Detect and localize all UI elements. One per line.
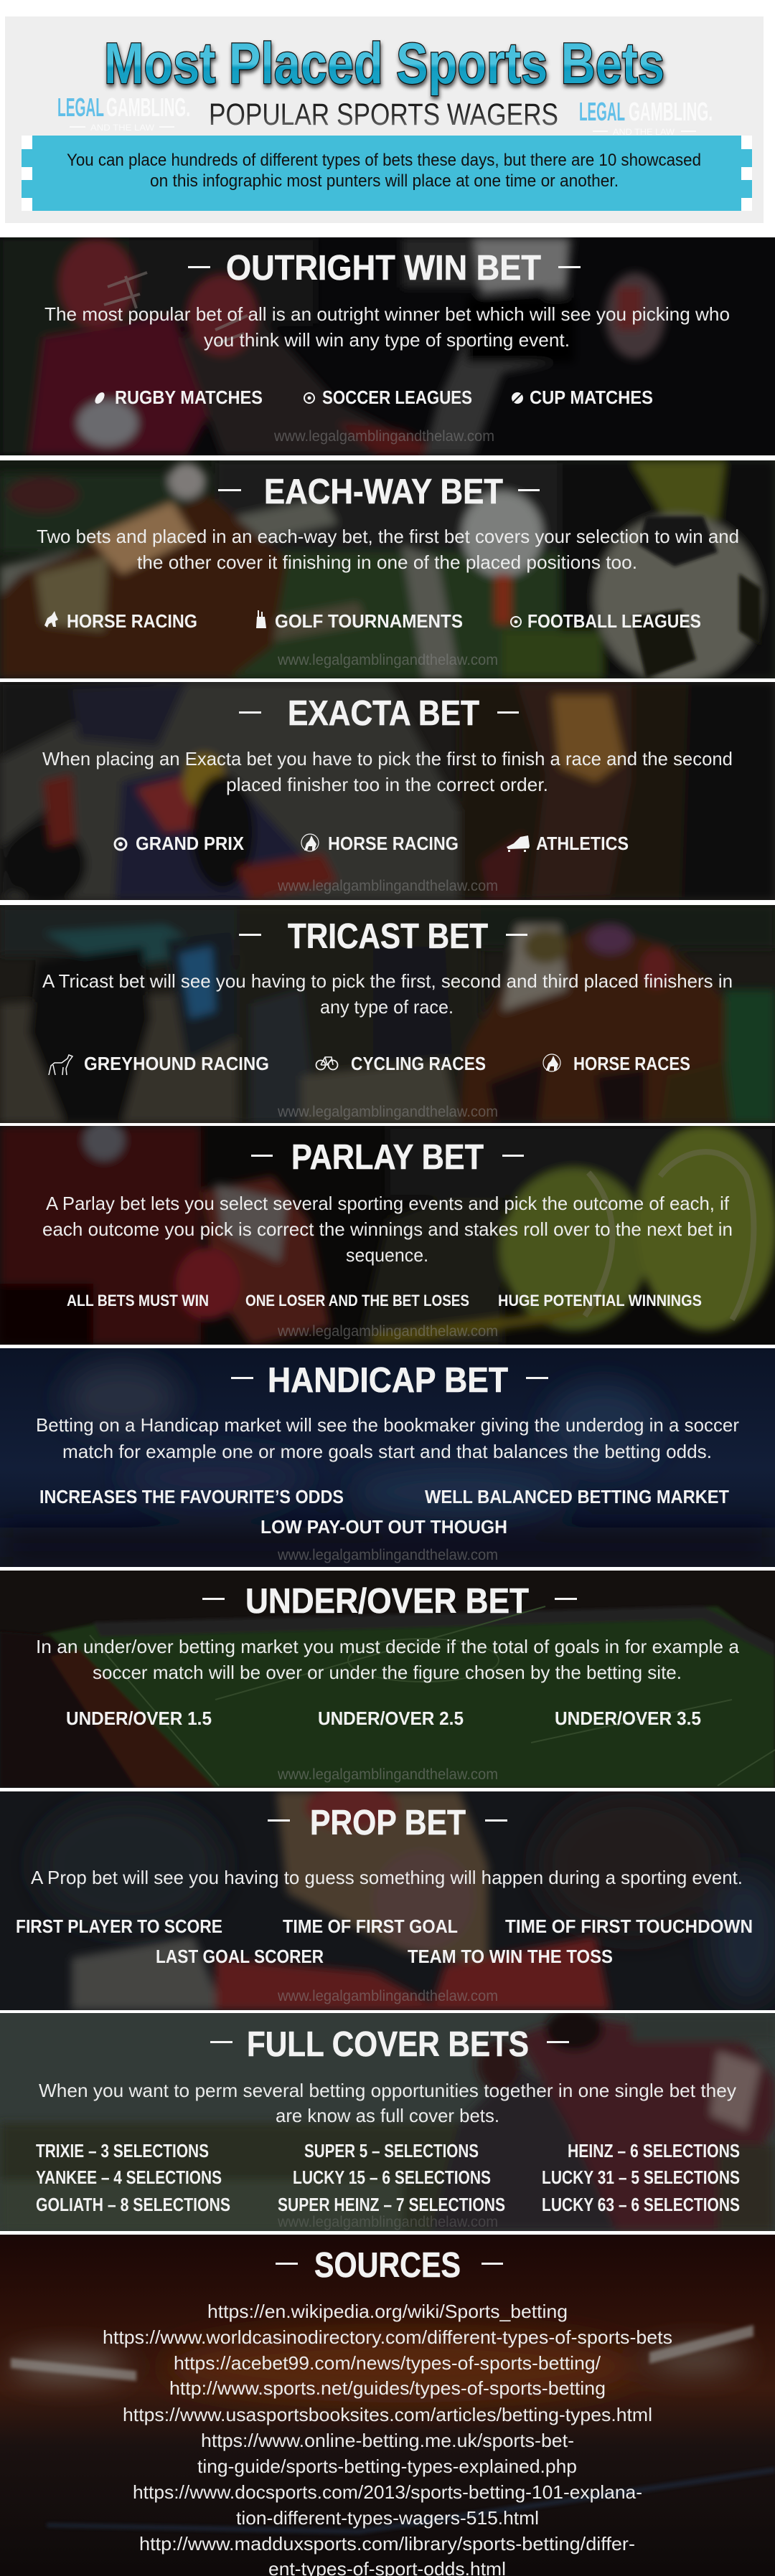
source list: https://www.worldcasinodirectory.com/different-types-of-sports-bets — [103, 2326, 672, 2348]
watermark: www.legalgamblingandthelaw.com — [277, 1323, 498, 1340]
description: A Parlay bet lets you select several sporting events and pick the outcome of each, if — [46, 1193, 730, 1214]
description: The most popular bet of all is an outright winner bet which will see you picking who — [44, 303, 730, 325]
logo: right legal gambling: LEGAL — [579, 97, 625, 126]
watermark: www.legalgamblingandthelaw.com — [277, 1766, 498, 1783]
description — [39, 2080, 736, 2126]
item: football leagues: FOOTBALL LEAGUES — [527, 610, 701, 632]
heading: HANDICAP BET — [268, 1361, 508, 1400]
description: match for example one or more goals start and that balances the betting odds. — [62, 1441, 712, 1462]
heading: TRICAST BET — [288, 917, 488, 956]
item: rugby matches: RUGBY MATCHES — [115, 387, 263, 408]
description: any type of race. — [320, 996, 454, 1018]
watermark: www.legalgamblingandthelaw.com — [273, 428, 494, 445]
panel: sources — [0, 2235, 775, 2576]
description — [36, 1414, 739, 1462]
description — [36, 1636, 740, 1683]
item: cup matches: CUP MATCHES — [530, 387, 653, 408]
item: horse racing: HORSE RACING — [67, 610, 197, 632]
description: Two bets and placed in an each-way bet, the first bet covers your selection to win and — [37, 526, 739, 547]
source list: tion-different-types-wagers-515.html — [236, 2507, 539, 2529]
panel: handicap bet — [0, 1348, 775, 1567]
list: selections column 1: GOLIATH – 8 SELECTIONS — [36, 2194, 230, 2215]
description: In an under/over betting market you must decide if the total of goals in for example a — [36, 1636, 740, 1657]
description — [44, 303, 730, 351]
description: A Tricast bet will see you having to pick the first, second and third placed finishers in — [42, 970, 733, 992]
intro ribbon: You can place hundreds of different types of bets these days, but there are 10 showcased — [67, 151, 701, 170]
logo: left legal gambling: GAMBLING. — [106, 93, 190, 122]
panel: exacta bet — [0, 682, 775, 900]
logo: right legal gambling — [579, 97, 713, 137]
item: last goal scorer: LAST GOAL SCORER — [156, 1946, 324, 1967]
item: cycling races: CYCLING RACES — [351, 1053, 486, 1074]
heading: UNDER/OVER BET — [245, 1582, 529, 1621]
panel: outright win bet — [0, 237, 775, 455]
logo: left legal gambling: LEGAL — [57, 93, 104, 122]
description: Betting on a Handicap market will see the bookmaker giving the underdog in a soccer — [36, 1414, 739, 1436]
panel: full cover bets — [0, 2013, 775, 2231]
item: time of first goal: TIME OF FIRST GOAL — [283, 1916, 458, 1937]
item: all bets must win: ALL BETS MUST WIN — [67, 1292, 209, 1310]
description — [42, 970, 733, 1018]
item: increases the favourite's odds: INCREASES THE FAVOURITE’S ODDS — [39, 1486, 344, 1507]
header panel — [5, 16, 764, 223]
heading: SOURCES — [314, 2246, 461, 2285]
description: sequence. — [346, 1244, 428, 1266]
description — [42, 748, 733, 795]
list: selections column 1: TRIXIE – 3 SELECTIONS — [36, 2140, 209, 2161]
list: selections column 3: HEINZ – 6 SELECTIONS — [568, 2140, 740, 2161]
subtitle: POPULAR SPORTS WAGERS — [209, 98, 558, 132]
item: time of first touchdown: TIME OF FIRST TOUCHDOWN — [505, 1916, 753, 1937]
heading: EXACTA BET — [288, 694, 479, 733]
logo: right legal gambling: AND THE LAW — [613, 127, 675, 137]
item: golf tournaments: GOLF TOURNAMENTS — [275, 610, 463, 632]
source list: https://www.usasportsbooksites.com/articles/betting-types.html — [123, 2404, 652, 2425]
panel: prop bet — [0, 1791, 775, 2010]
heading: EACH-WAY BET — [264, 473, 503, 511]
source list: http://www.madduxsports.com/library/sports-betting/differ- — [139, 2533, 635, 2554]
item: soccer leagues: SOCCER LEAGUES — [322, 387, 472, 408]
item: horse races: HORSE RACES — [573, 1053, 690, 1074]
logo: left legal gambling — [57, 93, 190, 133]
item: well balanced betting market: WELL BALANCED BETTING MARKET — [425, 1486, 729, 1507]
list: selections column 2: LUCKY 15 – 6 SELECTIONS — [293, 2167, 491, 2188]
item: athletics — [507, 833, 629, 854]
item: huge potential winnings: HUGE POTENTIAL WINNINGS — [498, 1292, 702, 1310]
logo: right legal gambling: GAMBLING. — [629, 97, 713, 126]
heading: PROP BET — [310, 1804, 466, 1842]
source list — [103, 2301, 672, 2576]
item: horse racing: HORSE RACING — [328, 833, 459, 854]
item: first player to score: FIRST PLAYER TO SCORE — [16, 1916, 222, 1937]
description — [42, 1193, 733, 1266]
watermark: www.legalgamblingandthelaw.com — [277, 878, 498, 894]
heading: OUTRIGHT WIN BET — [226, 249, 541, 288]
panel: each-way bet — [0, 460, 775, 678]
source list: https://en.wikipedia.org/wiki/Sports_betting — [207, 2301, 568, 2322]
list: selections column 1: YANKEE – 4 SELECTIONS — [36, 2167, 222, 2188]
description: placed finisher too in the correct order. — [226, 774, 548, 795]
list: selections column 3 — [542, 2140, 740, 2215]
description: When you want to perm several betting opportunities together in one single bet they — [39, 2080, 736, 2101]
item: grand prix: GRAND PRIX — [136, 833, 245, 854]
description: When placing an Exacta bet you have to pick the first to finish a race and the second — [42, 748, 733, 770]
panel: parlay bet — [0, 1126, 775, 1345]
source list: https://www.online-betting.me.uk/sports-bet- — [201, 2430, 574, 2451]
source list: ting-guide/sports-betting-types-explained.php — [197, 2456, 577, 2477]
watermark: www.legalgamblingandthelaw.com — [277, 1104, 498, 1120]
item: athletics: ATHLETICS — [536, 833, 629, 854]
list: selections column 2: SUPER HEINZ – 7 SELECTIONS — [278, 2194, 505, 2215]
source list: https://www.docsports.com/2013/sports-betting-101-explana- — [133, 2481, 642, 2503]
list: selections column 1 — [36, 2140, 230, 2215]
description: each outcome you pick is correct the winnings and stakes roll over to the next bet in — [42, 1218, 733, 1240]
description: you think will win any type of sporting event. — [204, 329, 570, 351]
item: under/over 2.5: UNDER/OVER 2.5 — [318, 1708, 464, 1729]
source list: http://www.sports.net/guides/types-of-sports-betting — [169, 2377, 606, 2399]
logo: left legal gambling: AND THE LAW — [90, 123, 155, 133]
item: one loser and the bet loses: ONE LOSER AND THE BET LOSES — [245, 1292, 469, 1310]
item: under/over 1.5: UNDER/OVER 1.5 — [66, 1708, 212, 1729]
heading: PARLAY BET — [291, 1138, 484, 1177]
source list: https://acebet99.com/news/types-of-sports-betting/ — [174, 2352, 601, 2374]
description: the other cover it finishing in one of the placed positions too. — [137, 551, 637, 573]
list: selections column 2 — [278, 2140, 505, 2215]
watermark: www.legalgamblingandthelaw.com — [277, 652, 498, 668]
description: A Prop bet will see you having to guess something will happen during a sporting event. — [31, 1867, 743, 1888]
intro ribbon — [22, 136, 752, 211]
intro ribbon: on this infographic most punters will place at one time or another. — [150, 171, 619, 191]
item: low pay-out: LOW PAY-OUT OUT THOUGH — [260, 1516, 507, 1538]
item: under/over 3.5: UNDER/OVER 3.5 — [555, 1708, 701, 1729]
watermark: www.legalgamblingandthelaw.com — [277, 1547, 498, 1563]
heading: FULL COVER BETS — [247, 2025, 529, 2064]
description — [37, 526, 739, 573]
watermark: www.legalgamblingandthelaw.com — [277, 2214, 498, 2230]
item: greyhound racing: GREYHOUND RACING — [84, 1053, 269, 1074]
panel: under/over bet — [0, 1571, 775, 1788]
title: Most Placed Sports Bets — [104, 32, 664, 96]
panel: tricast bet — [0, 905, 775, 1123]
watermark: www.legalgamblingandthelaw.com — [277, 1988, 498, 2004]
description: soccer match will be over or under the figure chosen by the betting site. — [93, 1662, 682, 1683]
list: selections column 2: SUPER 5 – SELECTIONS — [304, 2140, 479, 2161]
item: team to win the toss: TEAM TO WIN THE TOSS — [408, 1946, 613, 1967]
description: are know as full cover bets. — [276, 2105, 499, 2126]
